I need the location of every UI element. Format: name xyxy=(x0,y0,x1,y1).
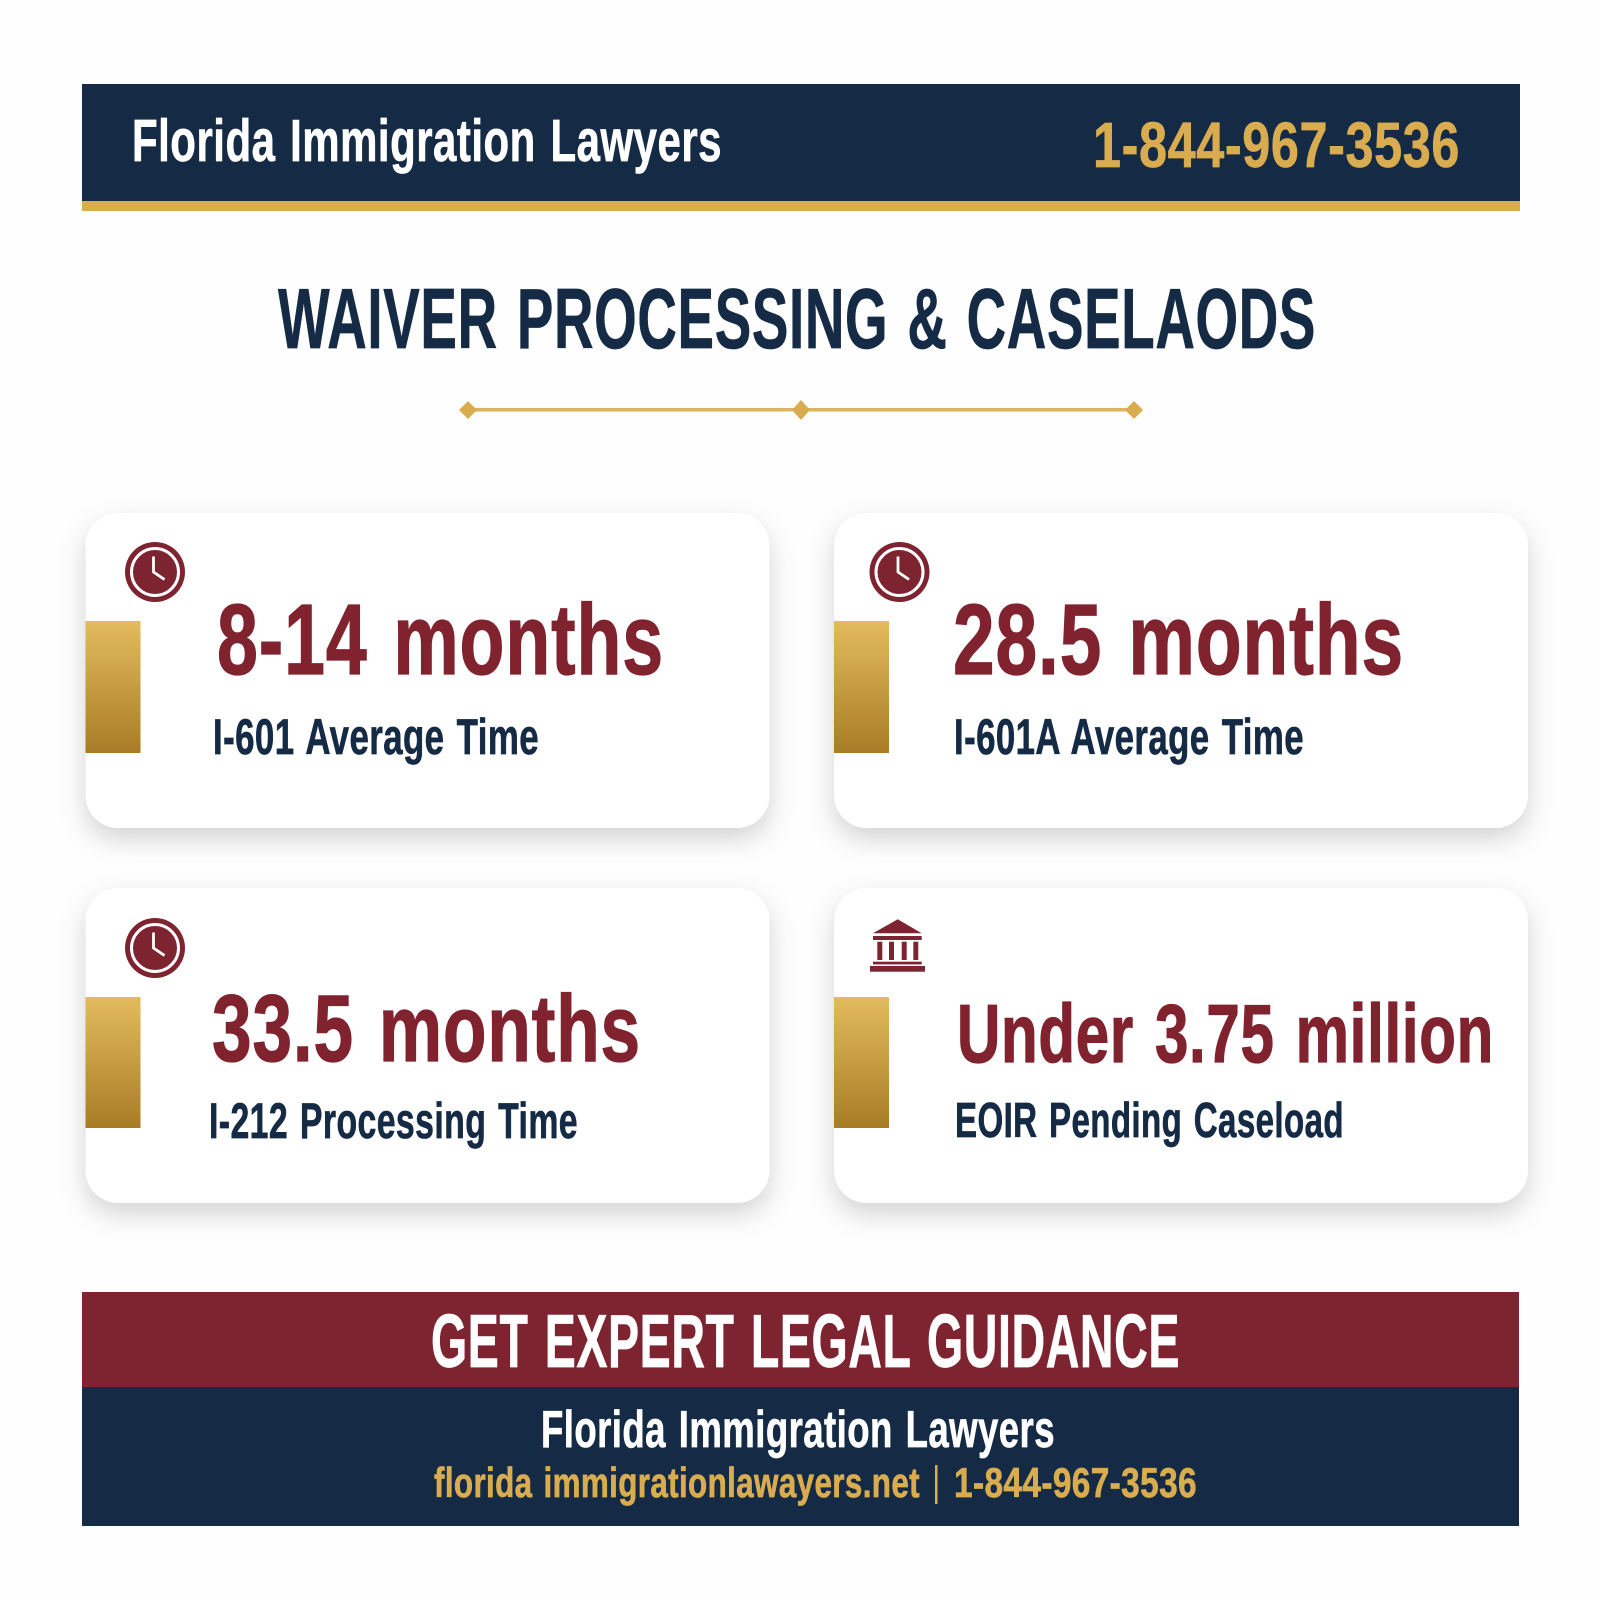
website and phone: florida immigrationlawayers.net xyxy=(434,1459,920,1506)
firm name: Florida Immigration Lawyers xyxy=(132,108,722,174)
icon: clock xyxy=(125,542,185,602)
gold accent bar xyxy=(86,997,140,1128)
label: I-212 Processing Time xyxy=(209,1093,578,1149)
gold accent bar xyxy=(834,621,889,753)
gold accent bar xyxy=(86,621,140,753)
icon: clock xyxy=(870,542,930,602)
icon: clock xyxy=(125,918,185,978)
website and phone: 1-844-967-3536 xyxy=(954,1459,1197,1506)
header banner xyxy=(82,84,1520,211)
value: 28.5 months xyxy=(953,584,1404,696)
title divider xyxy=(459,400,1143,420)
label: I-601 Average Time xyxy=(213,709,539,765)
footer call to action xyxy=(82,1292,1519,1526)
card: EOIR pending caseload xyxy=(834,888,1528,1203)
label: I-601A Average Time xyxy=(954,709,1304,765)
gold accent bar xyxy=(834,997,889,1128)
firm name: Florida Immigration Lawyers xyxy=(541,1401,1055,1459)
value: 8-14 months xyxy=(217,584,664,696)
card: I-601A average time xyxy=(834,513,1528,828)
card: I-212 processing time xyxy=(86,888,770,1203)
label: EOIR Pending Caseload xyxy=(955,1094,1344,1148)
phone number: 1-844-967-3536 xyxy=(1093,109,1460,181)
card: I-601 average time xyxy=(86,513,770,828)
value: 33.5 months xyxy=(212,976,641,1082)
icon: courthouse xyxy=(870,919,925,972)
